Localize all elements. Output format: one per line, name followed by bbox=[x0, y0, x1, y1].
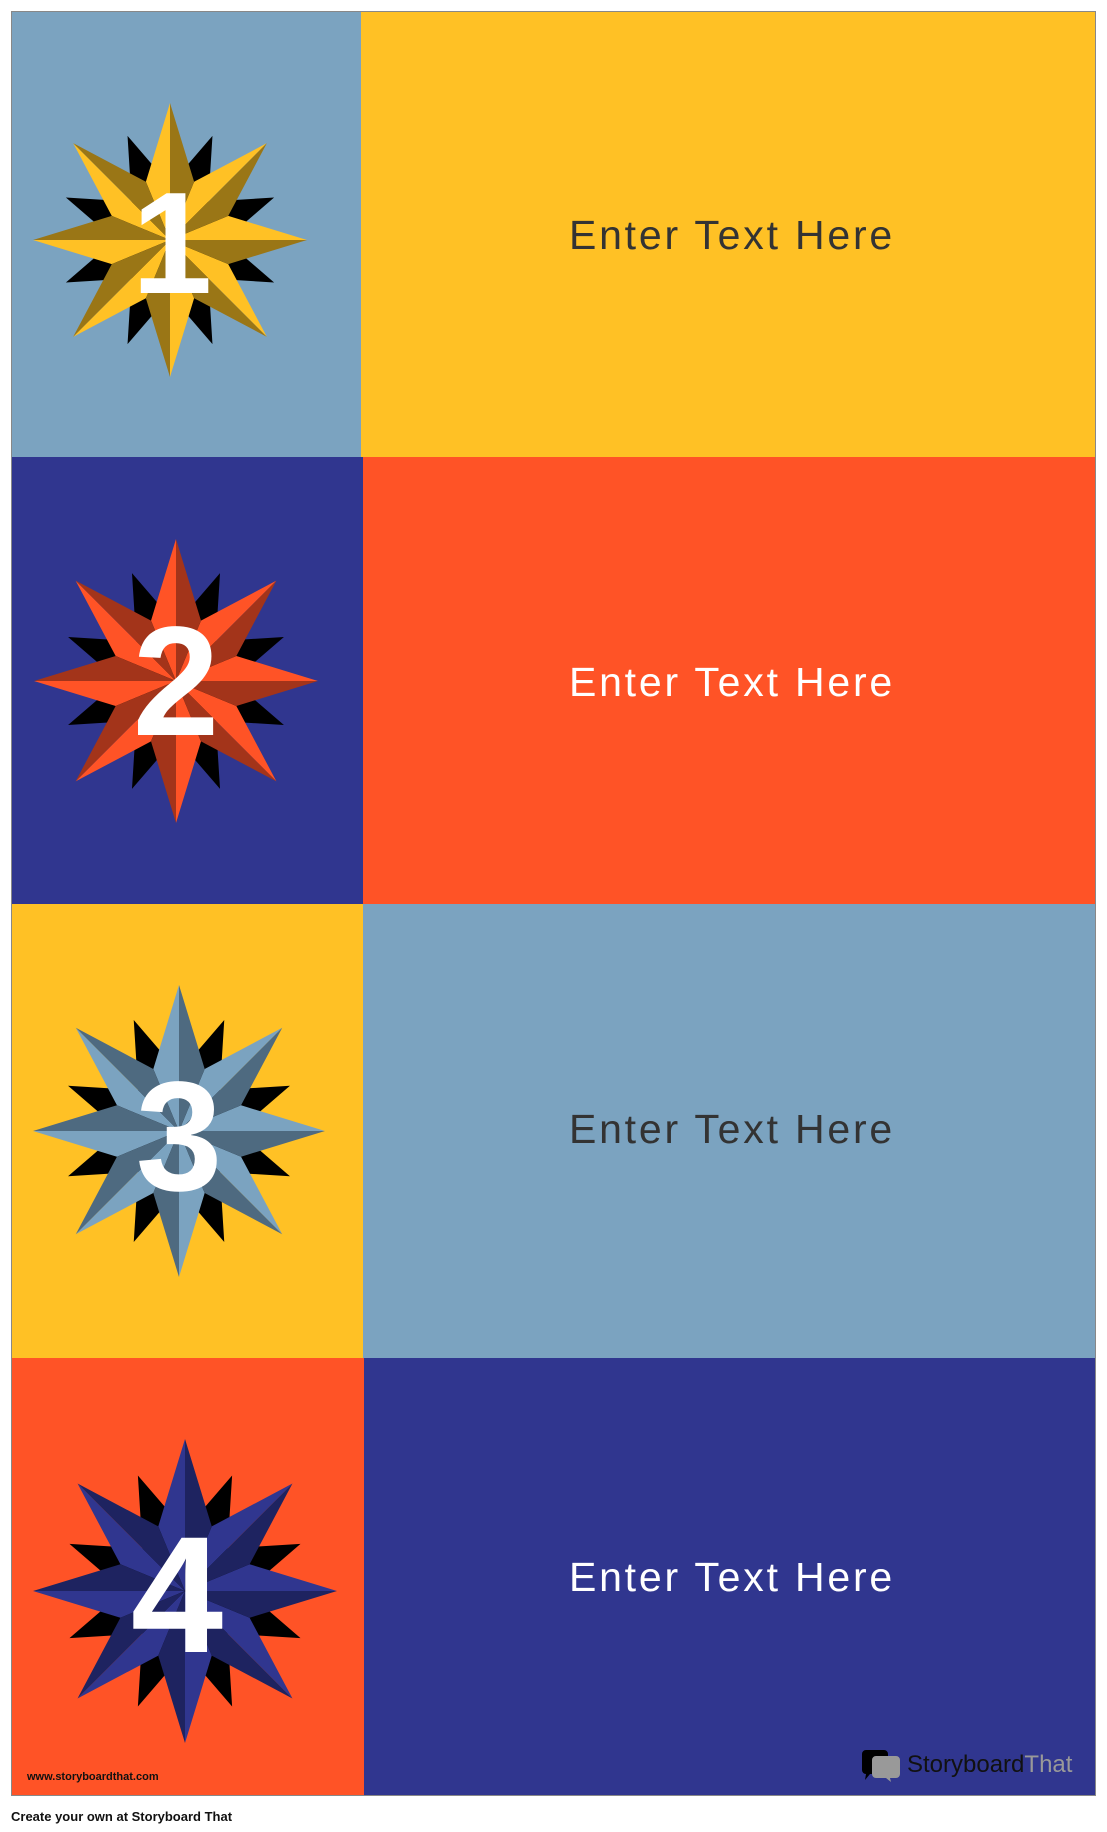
caption: Create your own at Storyboard That bbox=[11, 1809, 232, 1824]
logo text: StoryboardThat bbox=[907, 1751, 1072, 1778]
icon: star 2 bbox=[34, 539, 318, 823]
text block 3: Enter Text Here bbox=[569, 1106, 895, 1152]
panel: row 1 right bbox=[361, 12, 1095, 457]
panel: row 3 right bbox=[363, 904, 1095, 1358]
panel: row 4 left bbox=[12, 1358, 364, 1795]
panel: row 3 left bbox=[12, 904, 363, 1358]
icon: star 4 bbox=[33, 1439, 337, 1743]
panel: row 4 right bbox=[364, 1358, 1095, 1795]
number 4: 4 bbox=[131, 1503, 223, 1688]
icon: speech bubbles bbox=[862, 1750, 900, 1782]
number 2: 2 bbox=[133, 595, 219, 769]
icon: star 1 bbox=[33, 103, 307, 377]
logo bbox=[862, 1750, 1072, 1782]
panel: row 1 left bbox=[12, 12, 361, 457]
number 3: 3 bbox=[136, 1050, 222, 1224]
panel: row 2 right bbox=[363, 457, 1095, 904]
footer url: www.storyboardthat.com bbox=[27, 1771, 159, 1783]
text block 4: Enter Text Here bbox=[569, 1554, 895, 1600]
text block 1: Enter Text Here bbox=[569, 212, 895, 258]
icon: star 3 bbox=[33, 985, 325, 1277]
panel: row 2 left bbox=[12, 457, 363, 904]
number 1: 1 bbox=[132, 162, 212, 324]
text block 2: Enter Text Here bbox=[569, 659, 895, 705]
